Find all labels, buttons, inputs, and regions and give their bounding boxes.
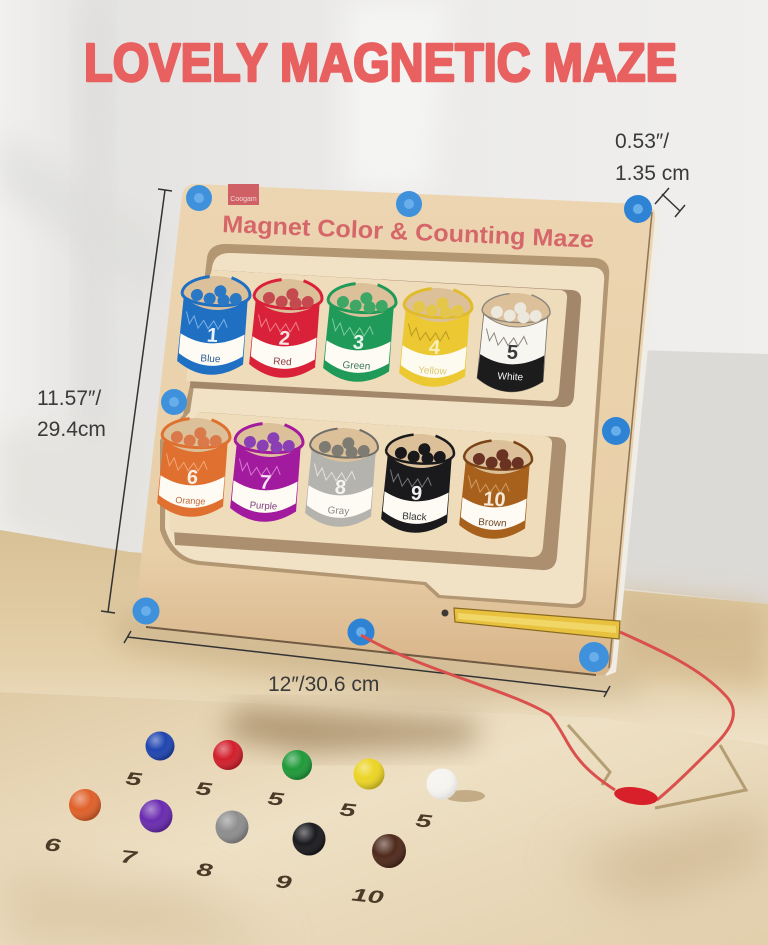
paint can 8 gray: Gray [327, 505, 350, 517]
paint can 8 gray [303, 426, 380, 529]
engraved bead counts: 5 [125, 769, 143, 790]
board heading: Magnet Color & Counting Maze [222, 211, 595, 254]
label height: 11.57″/ [37, 387, 101, 410]
engraved bead counts: 10 [351, 885, 385, 908]
engraved bead counts: 6 [44, 835, 62, 856]
maze groove floor [160, 244, 609, 608]
paint can 6 orange: Orange [175, 495, 206, 507]
background wall [0, 0, 768, 604]
dimension line height [101, 189, 172, 613]
cord shadow [568, 725, 746, 808]
paint can 2 red [247, 277, 324, 380]
lower island [168, 412, 566, 570]
paint can 7 purple: Purple [249, 500, 278, 512]
paint can 4 yellow [397, 286, 474, 389]
maze board [132, 184, 662, 676]
engraved bead counts: 5 [415, 811, 433, 832]
dimension line thickness [655, 188, 685, 217]
paint can 4 yellow: Yellow [418, 365, 448, 378]
paint can 9 black [379, 432, 456, 535]
paint can 9 black: Black [402, 511, 428, 523]
label height: 29.4cm [37, 418, 106, 441]
engraved bead counts: 9 [275, 872, 293, 893]
paint can 8 gray: 8 [334, 477, 347, 499]
paint can 6 orange: 6 [186, 467, 199, 489]
wooden shelf [0, 530, 768, 745]
upper island [186, 270, 581, 407]
label thickness: 0.53″/ [615, 130, 669, 153]
dimension line width [124, 631, 610, 697]
magnet stylus slot [442, 608, 620, 639]
paint can 10 brown: 10 [482, 488, 506, 511]
engraved bead counts: 5 [339, 800, 357, 821]
paint can 1 blue [175, 274, 252, 377]
paint can 7 purple: 7 [259, 472, 272, 494]
red cord [361, 632, 733, 800]
paint can 3 green [321, 281, 398, 384]
blue magnets [132, 185, 652, 672]
paint can 3 green: 3 [352, 332, 365, 354]
paint can 9 black: 9 [410, 483, 423, 505]
paint can 6 orange [155, 416, 232, 519]
engraved bead counts: 7 [120, 847, 140, 869]
label thickness: 1.35 cm [615, 162, 690, 185]
paint can 1 blue: Blue [200, 353, 221, 365]
engraved bead counts: 5 [195, 779, 213, 800]
red cord bead [613, 785, 659, 807]
paint can 5 white: White [497, 371, 524, 383]
paint can 10 brown [457, 438, 534, 541]
paint can 5 white: 5 [506, 342, 519, 364]
paint can 4 yellow: 4 [428, 337, 442, 359]
paint can 2 red: Red [273, 356, 292, 368]
paint can 1 blue: 1 [206, 325, 219, 347]
wooden table [0, 692, 768, 945]
paint can 5 white [475, 291, 552, 394]
title: LOVELY MAGNETIC MAZE [84, 33, 677, 93]
paint can 7 purple [228, 421, 305, 524]
paint can 10 brown: Brown [478, 517, 507, 530]
brand tag [228, 184, 259, 205]
engraved bead counts: 5 [267, 789, 285, 810]
engraved bead counts: 8 [196, 860, 214, 881]
paint can 2 red: 2 [278, 328, 291, 350]
loose beads [69, 732, 485, 868]
label width: 12″/30.6 cm [268, 673, 379, 696]
paint can 3 green: Green [342, 360, 371, 373]
engraved bead counts [44, 769, 433, 908]
brand tag: Coogam [230, 196, 257, 203]
